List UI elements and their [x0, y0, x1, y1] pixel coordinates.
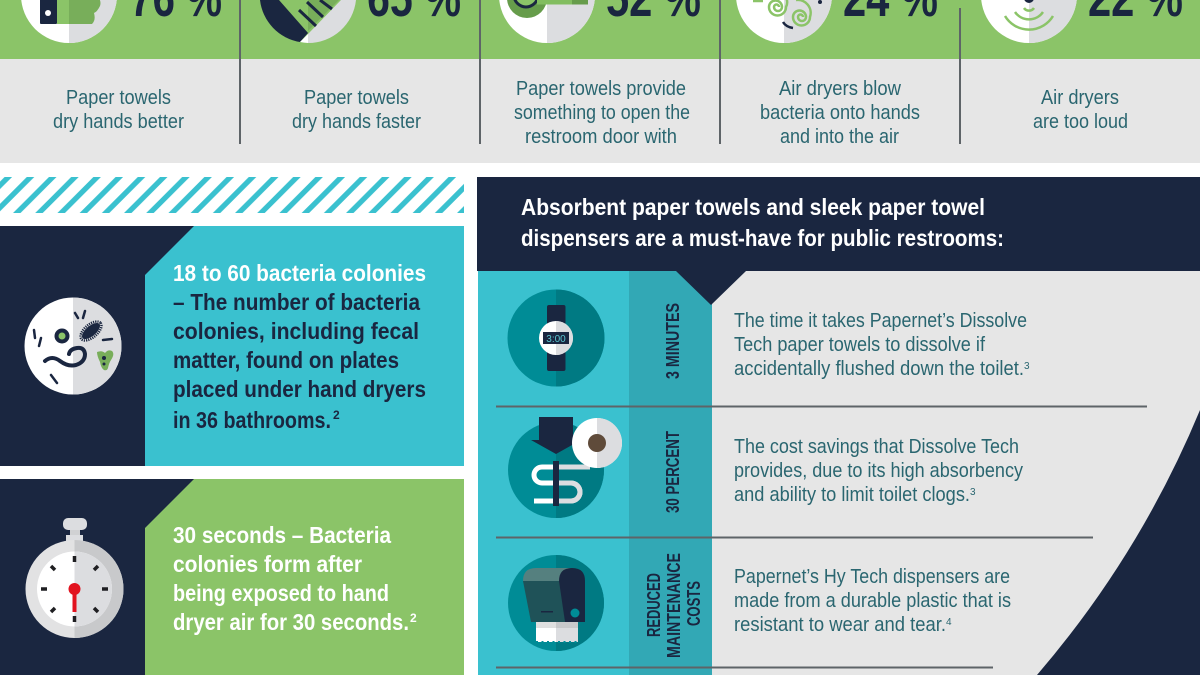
label: reduced maintenance costs: COSTS [684, 581, 704, 626]
text: 18 to 60 bacteria colonies: in 36 bathrooms. [173, 407, 331, 433]
text: durable dispensers [734, 566, 1011, 636]
caption: dry hands better: Paper towels [66, 87, 171, 109]
label: reduced maintenance costs: REDUCED [644, 573, 664, 637]
text: 30 seconds: 30 seconds – Bacteria [173, 522, 391, 548]
text: 30 seconds [173, 522, 417, 635]
panel: must-have list [477, 177, 1200, 675]
text: 30 seconds: colonies form after [173, 551, 362, 577]
text: 18 to 60 bacteria colonies: – The number of bacteria [173, 289, 420, 315]
caption: too loud: are too loud [1033, 111, 1128, 133]
label: 3 minutes: 3 MINUTES [663, 303, 683, 379]
text: dissolve time: The time it takes Papernet’s Dissolve [734, 310, 1027, 332]
text: dissolve time [734, 310, 1030, 380]
caption: open the restroom door: restroom door with [525, 126, 677, 148]
panel: survey results strip [0, 0, 1200, 163]
label: 30 percent: 30 PERCENT [663, 431, 683, 513]
caption: dry hands faster: Paper towels [304, 87, 409, 109]
icon: sound waves circle [981, 0, 1077, 43]
icon: stopwatch [26, 518, 124, 638]
text: 18 to 60 bacteria colonies: colonies, including fecal [173, 318, 419, 344]
caption: blow bacteria: bacteria onto hands [760, 102, 920, 124]
caption: dry hands faster [292, 87, 421, 133]
caption: dry hands faster: dry hands faster [292, 111, 421, 133]
text: durable dispensers: 4 [946, 617, 952, 628]
panel: 30 seconds [0, 479, 464, 675]
panel: bacteria colonies [0, 226, 464, 466]
text: dissolve time: accidentally flushed down the toilet. [734, 358, 1024, 380]
caption: open the restroom door [514, 78, 690, 148]
text: 18 to 60 bacteria colonies: placed under hand dryers [173, 376, 426, 402]
caption: too loud [1033, 87, 1128, 133]
text: 30 seconds: being exposed to hand [173, 580, 389, 606]
caption: too loud: Air dryers [1041, 87, 1119, 109]
caption: open the restroom door: something to open the [514, 102, 690, 124]
caption: blow bacteria: Air dryers blow [779, 78, 902, 100]
heading: must-have: dispensers are a must-have for public restrooms: [521, 225, 1004, 251]
text: dissolve time: Tech paper towels to dissolve if [734, 334, 985, 356]
text: cost savings: 3 [970, 487, 976, 498]
caption: blow bacteria [760, 78, 920, 148]
text: durable dispensers: resistant to wear and tear. [734, 614, 946, 636]
text: durable dispensers: Papernet’s Hy Tech dispensers are [734, 566, 1010, 588]
icon: bacteria dish [24, 298, 122, 394]
heading: must-have [477, 177, 1200, 271]
text: 18 to 60 bacteria colonies: 18 to 60 bacteria colonies [173, 260, 426, 286]
icon: towel circle [260, 0, 356, 43]
caption: dry hands better: dry hands better [53, 111, 184, 133]
text: 18 to 60 bacteria colonies [173, 260, 426, 433]
text: 30 seconds: 2 [410, 611, 417, 625]
text: 30 seconds: dryer air for 30 seconds. [173, 609, 409, 635]
icon: towel dispenser [508, 555, 604, 651]
label: reduced maintenance costs: MAINTENANCE [664, 553, 684, 658]
text: dissolve time: 3 [1024, 361, 1030, 372]
label: reduced maintenance costs [644, 553, 704, 658]
text: cost savings: and ability to limit toilet clogs. [734, 484, 970, 506]
text: cost savings [734, 436, 1023, 506]
icon: hand drying circle [21, 0, 117, 43]
caption: open the restroom door: Paper towels provide [516, 78, 686, 100]
icon: door handle circle [499, 0, 595, 43]
text: durable dispensers: made from a durable plastic that is [734, 590, 1011, 612]
icon: watch: 3:00 [546, 334, 566, 345]
text: cost savings: provides, due to its high absorbency [734, 460, 1023, 482]
icon: toilet roll and pipe [508, 417, 622, 518]
caption: blow bacteria: and into the air [780, 126, 899, 148]
text: cost savings: The cost savings that Dissolve Tech [734, 436, 1019, 458]
text: 18 to 60 bacteria colonies: matter, found on plates [173, 347, 399, 373]
text: 18 to 60 bacteria colonies: 2 [333, 408, 340, 422]
icon: bacteria in air circle [736, 0, 832, 43]
heading: must-have: Absorbent paper towels and sleek paper towel [521, 194, 985, 220]
icon: watch [508, 290, 604, 386]
caption: dry hands better [53, 87, 184, 133]
